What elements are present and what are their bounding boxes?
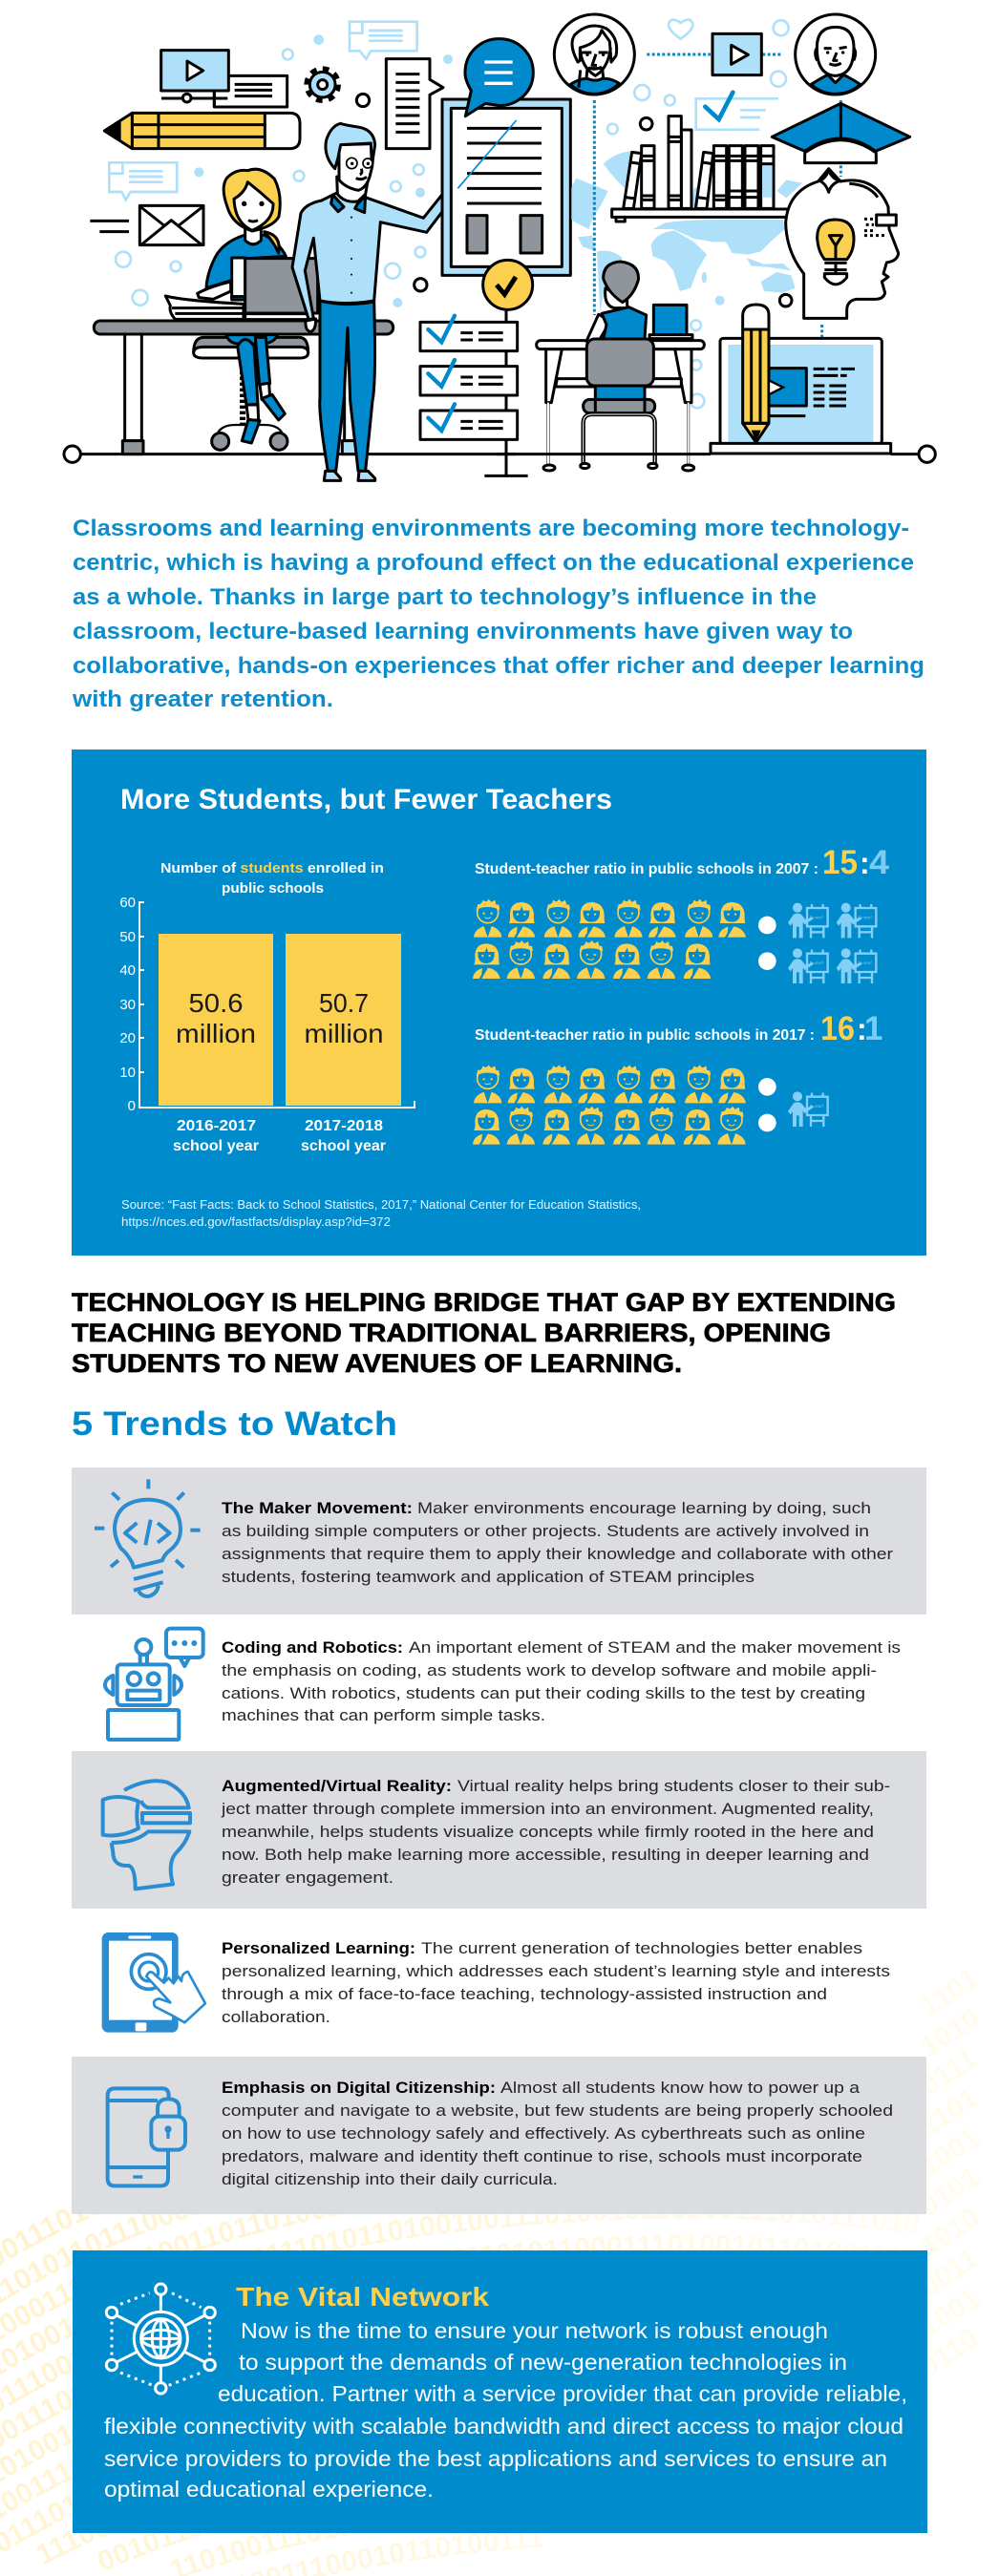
- icon: VR headset: [103, 1781, 190, 1889]
- bar 2017-2018: [286, 934, 401, 1106]
- y axis labels: 0: [128, 1098, 136, 1114]
- checklist signpost: [420, 260, 533, 475]
- y axis labels: 20: [119, 1030, 136, 1046]
- ratio heading 2017: 1: [864, 1010, 882, 1047]
- trend text: ject matter through complete immersion into an environment. Augmented reality,: [221, 1800, 874, 1818]
- source note: [121, 1198, 641, 1229]
- trend text: digital citizenship into their daily curricula.: [222, 2170, 558, 2188]
- panel body text: to support the demands of new-generation technologies in: [239, 2350, 847, 2375]
- trend text: greater engagement.: [222, 1869, 393, 1887]
- icon: phone with padlock: [108, 2088, 185, 2185]
- trend text: [222, 1499, 893, 1586]
- background binary watermark: 1001: [915, 2282, 986, 2343]
- bar 2017-2018: million: [304, 1019, 384, 1048]
- ratio heading 2017: [475, 1010, 882, 1047]
- y axis labels: 10: [119, 1065, 136, 1081]
- panel: emphasis on digital citizenship: [72, 2057, 926, 2214]
- panel: the maker movement: [72, 1467, 926, 1615]
- icon: pencil vertical: [743, 305, 783, 442]
- checklist row 1: [420, 316, 518, 351]
- desk: [122, 332, 358, 454]
- pictogram: students and teacher 2017: [473, 1065, 828, 1145]
- bold statement: [72, 1288, 896, 1378]
- ground line: [64, 446, 516, 462]
- icon: document: [386, 59, 443, 149]
- icon: graduation cap: [772, 103, 910, 163]
- bold statement: STUDENTS TO NEW AVENUES OF LEARNING.: [72, 1349, 682, 1378]
- girl student: [165, 169, 318, 443]
- background binary watermark: 0011: [915, 2243, 984, 2303]
- flip board: [442, 99, 570, 275]
- bold statement: TEACHING BEYOND TRADITIONAL BARRIERS, OPENING: [72, 1319, 831, 1347]
- panel body text: education. Partner with a service provider that can provide reliable,: [218, 2381, 907, 2406]
- source note: https://nces.ed.gov/fastfacts/display.asp?id=372: [121, 1215, 391, 1229]
- y axis labels: 50: [119, 929, 136, 945]
- decorative rings and dots: [116, 34, 453, 307]
- trend text: as building simple computers or other projects. Students are actively involved in: [222, 1522, 869, 1540]
- laptop: [711, 338, 891, 454]
- panel: the vital network: [73, 2250, 927, 2533]
- intro paragraph: collaborative, hands-on experiences that offer richer and deeper learning: [73, 653, 925, 679]
- background binary watermark: 1010: [915, 2202, 986, 2263]
- icon: robot: [105, 1629, 203, 1740]
- avatar: woman: [554, 14, 634, 95]
- intro paragraph: centric, which is having a profound effect on the educational experience: [73, 550, 914, 576]
- panel: personalized learning: [102, 1932, 890, 2033]
- icon: tablet with touch: [102, 1932, 205, 2033]
- checklist row 2: [420, 360, 518, 395]
- trend text: meanwhile, helps students visualize concepts while firmly rooted in the here and: [222, 1823, 874, 1841]
- icon: chat bubble left: [109, 162, 177, 200]
- intro paragraph: as a whole. Thanks in large part to technology’s influence in the: [73, 584, 817, 610]
- x axis labels: school year: [173, 1138, 259, 1154]
- hero illustration: classroom scene: [64, 14, 935, 480]
- ratio heading 2007: [475, 844, 890, 881]
- trend text: collaboration.: [222, 2008, 330, 2026]
- panel body text: service providers to provide the best applications and services to ensure an: [104, 2446, 887, 2471]
- left half of illustration: [64, 22, 570, 480]
- ratio heading 2017: 16: [820, 1010, 855, 1047]
- icon: pencil horizontal: [104, 113, 300, 149]
- desk top: [94, 321, 393, 334]
- panel body text: [104, 2318, 907, 2502]
- background binary watermark: 0010110100111001011010111001: [98, 2533, 202, 2570]
- avatar: man: [796, 14, 876, 95]
- intro paragraph: Classrooms and learning environments are becoming more technology-: [73, 516, 909, 541]
- trend text: students, fostering teamwork and application of STEAM principles: [222, 1568, 755, 1586]
- world map: [571, 151, 802, 312]
- ratio heading 2017: :: [857, 1012, 867, 1046]
- icon: checked card: [696, 93, 778, 130]
- intro paragraph: [72, 516, 925, 712]
- bar 2016-2017: [159, 934, 273, 1106]
- panel: more students, fewer teachers: [72, 750, 926, 1256]
- trend text: An important element of STEAM and the maker movement is: [409, 1638, 901, 1657]
- chart title: public schools: [222, 880, 324, 897]
- background binary watermark: 1010: [915, 2002, 986, 2063]
- y axis labels: 40: [119, 962, 136, 979]
- trend text: Maker environments encourage learning by doing, such: [417, 1499, 871, 1517]
- background binary watermark: 1001: [915, 2122, 986, 2183]
- panel heading: The Vital Network: [236, 2282, 489, 2312]
- x axis labels: school year: [301, 1138, 386, 1154]
- intro paragraph: classroom, lecture-based learning environments have given way to: [73, 619, 853, 644]
- dotted connector lines: [594, 54, 840, 420]
- trend text: [222, 2079, 893, 2188]
- pictogram: students and teachers 2007: [473, 899, 876, 983]
- background binary watermark: 1101: [915, 2082, 984, 2143]
- panel: augmented and virtual reality: [72, 1751, 926, 1909]
- background binary watermark: 0111: [915, 2043, 983, 2102]
- x axis labels: 2017-2018: [305, 1118, 383, 1134]
- icon: video play box: [712, 33, 761, 75]
- trend text: The Maker Movement:: [222, 1499, 413, 1517]
- background binary watermark: 1101: [915, 1963, 984, 2023]
- bar 2017-2018: 50.7: [319, 988, 369, 1018]
- panel heading: More Students, but Fewer Teachers: [120, 784, 612, 815]
- ratio heading 2007: 4: [869, 844, 890, 881]
- intro paragraph: with greater retention.: [72, 686, 333, 712]
- ground line right: [497, 446, 935, 462]
- ratio heading 2017: Student-teacher ratio in public schools in 2017 :: [475, 1027, 815, 1044]
- icon: envelope: [90, 205, 203, 245]
- background binary watermark: [0, 1963, 986, 2576]
- trend text: Emphasis on Digital Citizenship:: [222, 2079, 496, 2097]
- right half of illustration: [497, 14, 935, 471]
- icon: blue speech bubble: [465, 39, 533, 116]
- bookshelf: [612, 116, 788, 222]
- trend text: cations. With robotics, students can put their coding skills to the test by creating: [222, 1684, 865, 1702]
- trend text: Augmented/Virtual Reality:: [222, 1777, 452, 1795]
- y axis labels: 30: [119, 997, 136, 1013]
- trend text: on how to use technology safely and effectively. As cyberthreats such as online: [222, 2124, 865, 2143]
- office chair: [194, 337, 308, 450]
- panel: coding and robotics: [105, 1629, 901, 1740]
- icon: network globe: [106, 2284, 215, 2394]
- ratio heading 2007: Student-teacher ratio in public schools in 2007 :: [475, 861, 818, 877]
- bar chart: students enrolled: [119, 860, 414, 1154]
- bold statement: TECHNOLOGY IS HELPING BRIDGE THAT GAP BY EXTENDING: [72, 1288, 896, 1317]
- trend text: [222, 1638, 901, 1724]
- trend text: assignments that require them to apply their knowledge and collaborate with other: [222, 1545, 893, 1563]
- panel body text: optimal educational experience.: [104, 2477, 434, 2502]
- teacher figure: [292, 123, 459, 480]
- x axis labels: [173, 1118, 386, 1154]
- trend text: predators, malware and identity theft continue to rise, schools must incorporate: [222, 2147, 862, 2165]
- icon: code light bulb: [95, 1479, 201, 1596]
- source note: Source: “Fast Facts: Back to School Statistics, 2017,” National Center for Education Statistics,: [121, 1198, 641, 1212]
- trend text: Virtual reality helps bring students closer to their sub-: [457, 1777, 890, 1795]
- panel body text: Now is the time to ensure your network is robust enough: [241, 2318, 828, 2343]
- ratio heading 2007: 15: [822, 844, 858, 881]
- checklist row 3: [420, 404, 518, 439]
- trend text: Almost all students know how to power up a: [500, 2079, 861, 2097]
- trend text: machines that can perform simple tasks.: [222, 1706, 545, 1724]
- background binary watermark: 0110: [915, 2323, 984, 2383]
- trend text: Coding and Robotics:: [222, 1638, 403, 1657]
- trend text: through a mix of face-to-face teaching, technology-assisted instruction and: [222, 1985, 827, 2003]
- x axis labels: 2016-2017: [177, 1118, 256, 1134]
- trend text: computer and navigate to a website, but few students are being properly schooled: [222, 2101, 893, 2120]
- trend text: The current generation of technologies better enables: [421, 1939, 862, 1957]
- trend text: personalized learning, which addresses each student’s learning style and interests: [222, 1962, 890, 1980]
- chart title: [160, 860, 384, 897]
- icon: gear: [307, 69, 338, 100]
- trend text: Personalized Learning:: [222, 1939, 415, 1957]
- icon: chat bubble top: [350, 22, 417, 59]
- bar 2016-2017: 50.6: [189, 988, 243, 1018]
- trend text: [222, 1939, 890, 2026]
- head profile with light bulb: [786, 169, 899, 318]
- ratio heading 2007: :: [860, 846, 870, 880]
- trend text: now. Both help make learning more accessible, resulting in deeper learning and: [222, 1846, 869, 1864]
- icon: video card: [161, 51, 287, 107]
- bar 2016-2017: million: [176, 1019, 256, 1048]
- chart title: Number of students enrolled in: [160, 860, 384, 876]
- y axis labels: 60: [119, 895, 136, 911]
- trend text: the emphasis on coding, as students work to develop software and mobile appli-: [222, 1661, 877, 1679]
- section heading: 5 trends: 5 Trends to Watch: [72, 1405, 397, 1443]
- decorative rings: [607, 20, 792, 408]
- y axis labels: [119, 895, 136, 1114]
- background binary watermark: 0101: [915, 2162, 986, 2223]
- background binary watermark: 11100010110100111010110100100111: [36, 2530, 108, 2565]
- panel body text: flexible connectivity with scalable bandwidth and direct access to major cloud: [104, 2414, 903, 2439]
- student at desk: [537, 262, 704, 471]
- trend text: [221, 1777, 890, 1887]
